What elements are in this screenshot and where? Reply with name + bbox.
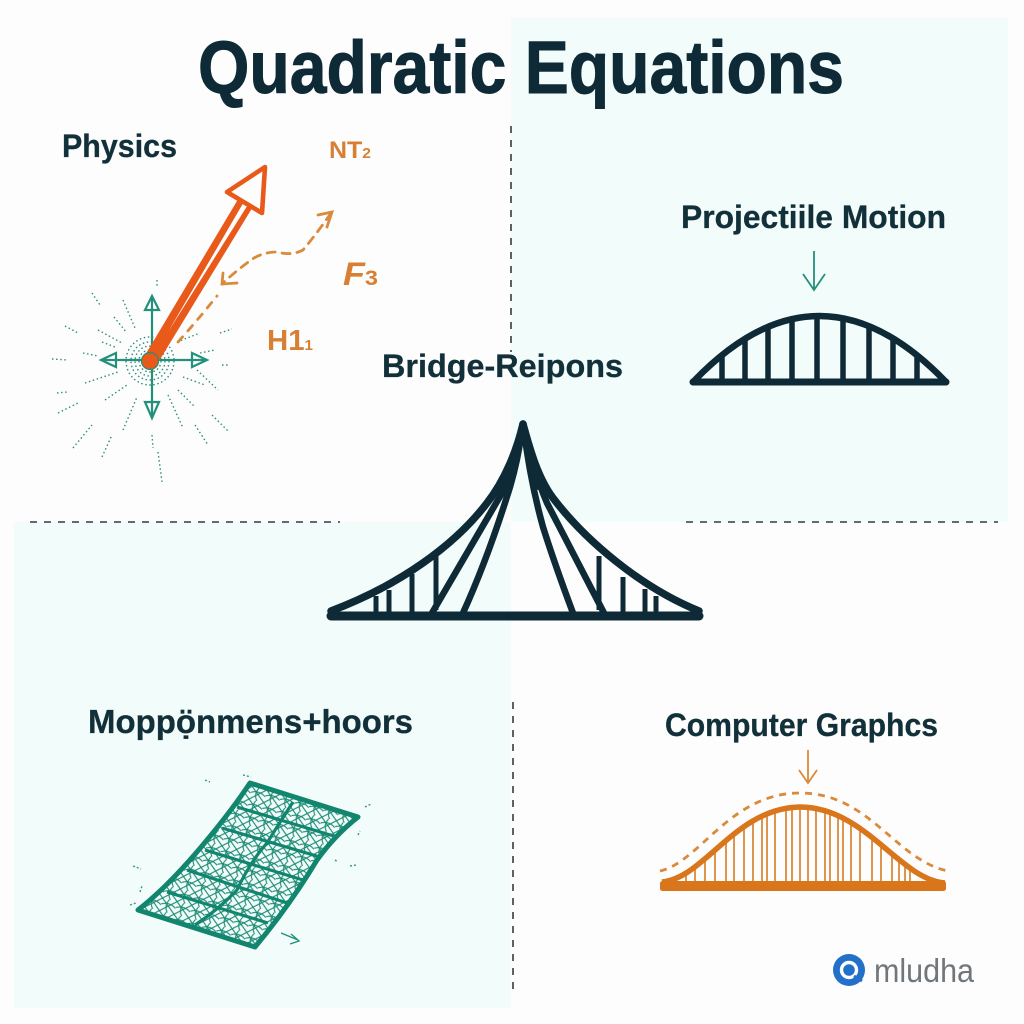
- icon: orange dashed trajectory: [178, 212, 332, 342]
- icon: suspension bridge: [331, 424, 699, 616]
- label: F3: F3: [343, 256, 378, 292]
- icon: orange down arrow: [799, 750, 817, 783]
- heading: computer graphics: Computer Graphcs: [665, 707, 938, 743]
- heading: physics: Physics: [62, 128, 177, 164]
- panel: bridge: [331, 348, 699, 616]
- icon: bell curve bridge: [660, 790, 948, 891]
- panel: top right background: [511, 18, 1008, 522]
- panel: projectile motion: [681, 199, 946, 382]
- icon: teal force arrows: [101, 296, 207, 418]
- icon: orange main arrow: [142, 167, 265, 370]
- panel: physics: [52, 128, 378, 482]
- panel: computer graphics: [660, 707, 948, 891]
- logo: mludha: mludha: [874, 952, 975, 989]
- icon: mesh grid: [130, 775, 371, 955]
- icon: green down arrow: [803, 251, 825, 290]
- heading: mesh surface: Moppọ̈nmens+hoors: [88, 703, 413, 740]
- label: H11: H11: [267, 325, 313, 357]
- label: NT2: NT2: [329, 137, 371, 164]
- heading: bridge: Bridge-Reipons: [382, 348, 623, 384]
- panel: bottom left background: [14, 522, 511, 1008]
- icon: radial dotted burst: [52, 280, 232, 482]
- panel: mesh surface: [88, 703, 413, 955]
- heading: projectile motion: Projectiile Motion: [681, 199, 946, 235]
- title: Quadratic Equations: [198, 26, 844, 109]
- logo: mludha: [833, 952, 975, 989]
- icon: arch bridge: [693, 316, 946, 382]
